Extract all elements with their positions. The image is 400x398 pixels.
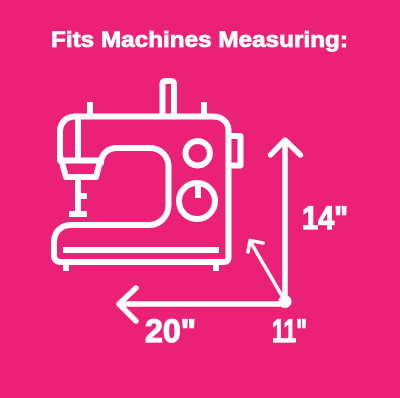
origin dot — [278, 295, 292, 308]
side tab — [231, 136, 240, 166]
thread pin left — [87, 102, 93, 116]
thread pin right — [201, 102, 207, 116]
spool holder — [162, 81, 174, 116]
label: 20 inches: 20" — [145, 313, 196, 349]
large dial — [179, 183, 215, 219]
label: 11 inches: 11" — [272, 313, 307, 349]
arrow: depth — [248, 240, 285, 301]
title: Fits Machines Measuring: — [51, 27, 348, 52]
needle — [69, 177, 87, 214]
arrow: width — [119, 288, 285, 321]
head divider — [75, 116, 81, 160]
icon: sewing machine — [54, 81, 240, 271]
base plate line — [63, 247, 219, 253]
machine body outline — [54, 116, 228, 262]
arrow: height — [270, 140, 300, 301]
needle head — [60, 157, 101, 177]
foot right — [213, 262, 219, 271]
dial tick — [195, 183, 201, 198]
label: 14 inches: 14" — [302, 200, 348, 236]
small dial — [186, 141, 210, 166]
foot left — [63, 262, 69, 271]
